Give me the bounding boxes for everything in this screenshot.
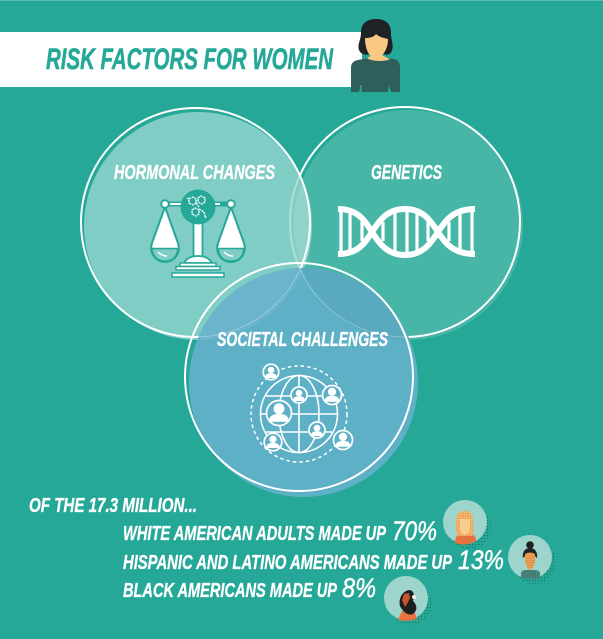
icon: DNA helix: [338, 208, 475, 255]
intro line: OF THE 17.3 MILLION...: [29, 495, 197, 517]
panel: genetics circle: [81, 107, 523, 340]
avatar: black woman: [384, 576, 432, 625]
title banner: [0, 32, 362, 87]
heading: societal challenges: SOCIETAL CHALLENGES: [217, 328, 388, 351]
stat: black americans 8%: BLACK AMERICANS MADE UP: [123, 579, 337, 602]
stat: white american adults 70%: 70%: [392, 516, 437, 546]
avatar: hispanic woman: [508, 535, 556, 584]
icon: globe with connected people: [251, 364, 352, 462]
stat: black americans 8%: 8%: [342, 573, 376, 603]
statistics text block: [29, 495, 504, 603]
stat: white american adults 70%: [123, 516, 437, 546]
stat: black americans 8%: [123, 573, 376, 603]
stat: hispanic and latino americans 13%: [123, 545, 504, 575]
heading: hormonal changes: HORMONAL CHANGES: [114, 161, 275, 184]
icon: woman portrait: [351, 19, 400, 92]
stat: white american adults 70%: WHITE AMERICAN ADULTS MADE UP: [123, 522, 386, 545]
avatar: white american woman: [443, 500, 491, 549]
stat: hispanic and latino americans 13%: HISPANIC AND LATINO AMERICANS MADE UP: [123, 551, 452, 574]
panel: hormonal changes circle: [84, 112, 312, 340]
icon: balance scale with molecule: [151, 190, 245, 277]
title: RISK FACTORS FOR WOMEN: [46, 43, 334, 76]
stat: hispanic and latino americans 13%: 13%: [458, 545, 504, 575]
panel: societal challenges circle: [184, 262, 418, 497]
heading: genetics: GENETICS: [371, 161, 442, 184]
